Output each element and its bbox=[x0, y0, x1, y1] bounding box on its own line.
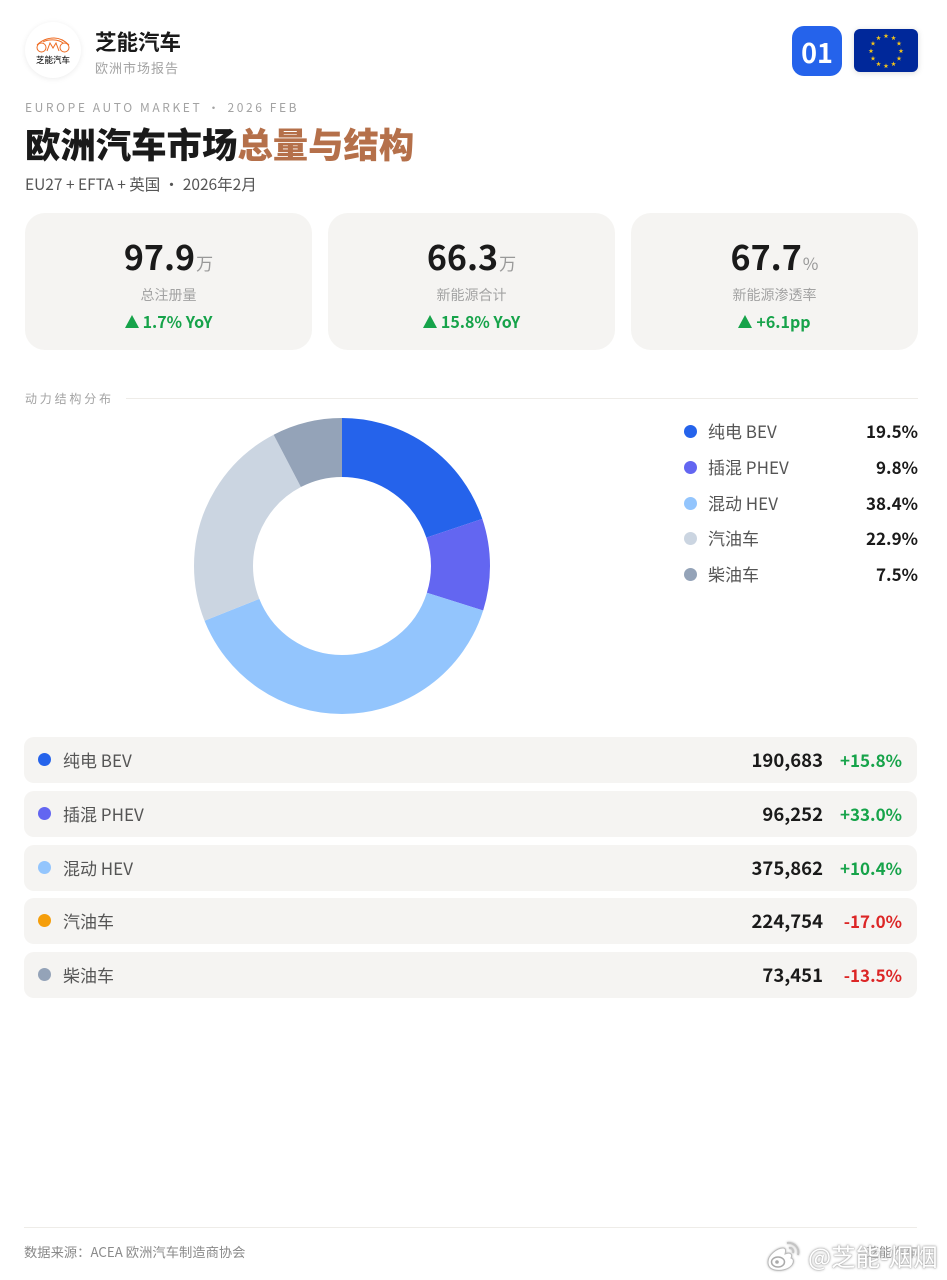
legend: PHEV: 9.8% bbox=[876, 454, 918, 479]
brand name: 芝能汽车 bbox=[95, 26, 181, 57]
KPI card: penetration bbox=[631, 213, 918, 350]
legend: HEV bbox=[684, 490, 918, 515]
KPI card: total bbox=[25, 213, 312, 350]
legend: petrol: 汽油车 bbox=[708, 525, 759, 550]
legend: diesel: 柴油车 bbox=[708, 561, 759, 586]
data row: PHEV: +33.0% bbox=[840, 801, 902, 826]
logo wordmark: 芝能汽车 bbox=[36, 54, 70, 66]
label: 新能源渗透率 bbox=[732, 285, 816, 305]
data row: HEV: 混动 HEV bbox=[63, 855, 133, 880]
data row: PHEV bbox=[24, 791, 917, 837]
eyebrow: EUROPE AUTO MARKET ・ 2026 FEB bbox=[25, 99, 299, 116]
brand subtitle: 欧洲市场报告 bbox=[95, 58, 179, 77]
data row: diesel: 柴油车 bbox=[63, 962, 114, 987]
data row: petrol: 224,754 bbox=[751, 908, 823, 934]
data row: HEV: +10.4% bbox=[840, 855, 902, 880]
data row: petrol: 汽油车 bbox=[63, 908, 114, 933]
KPI card: NEV bbox=[328, 213, 615, 350]
data row: diesel: 73,451 bbox=[762, 962, 823, 988]
data row: BEV: 190,683 bbox=[751, 747, 823, 773]
legend: BEV: 纯电 BEV bbox=[708, 418, 777, 443]
number badge: 01 bbox=[801, 32, 833, 71]
section heading: 动力结构分布 bbox=[25, 390, 114, 407]
logo badge bbox=[25, 22, 81, 78]
donut chart bbox=[194, 418, 490, 714]
data row: diesel: -13.5% bbox=[844, 962, 902, 987]
number badge bbox=[792, 26, 842, 76]
legend: diesel bbox=[684, 561, 918, 586]
data row: diesel bbox=[24, 952, 917, 998]
watermark text: @芝能-烟烟 bbox=[808, 1239, 938, 1274]
icon: orange car mark bbox=[36, 38, 70, 52]
value: 67.7% bbox=[731, 231, 818, 280]
title: 欧洲汽车市场总量与结构 bbox=[25, 118, 414, 169]
data row: petrol bbox=[24, 898, 917, 944]
data row: HEV: 375,862 bbox=[751, 855, 823, 881]
source note: 数据来源：ACEA 欧洲汽车制造商协会 bbox=[24, 1242, 245, 1261]
legend: PHEV: 插混 PHEV bbox=[708, 454, 789, 479]
change: 15.8% YoY bbox=[441, 309, 520, 333]
data row: PHEV: 插混 PHEV bbox=[63, 801, 144, 826]
legend: HEV: 38.4% bbox=[866, 490, 918, 515]
label: 总注册量 bbox=[140, 285, 196, 305]
label: 新能源合计 bbox=[436, 285, 506, 305]
legend: PHEV bbox=[684, 454, 918, 479]
watermark bbox=[766, 1239, 938, 1274]
value: 66.3万 bbox=[427, 231, 516, 280]
legend: petrol: 22.9% bbox=[866, 525, 918, 550]
legend: BEV: 19.5% bbox=[866, 418, 918, 443]
legend: HEV: 混动 HEV bbox=[708, 490, 778, 515]
legend: diesel: 7.5% bbox=[876, 561, 918, 586]
data row: petrol: -17.0% bbox=[844, 908, 902, 933]
data row: HEV bbox=[24, 845, 917, 891]
icon: EU flag bbox=[852, 28, 920, 75]
data row: BEV: 纯电 BEV bbox=[63, 747, 132, 772]
data row: BEV: +15.8% bbox=[840, 747, 902, 772]
icon: weibo bbox=[766, 1240, 800, 1272]
footer handle under watermark: 芝能汽车 bbox=[866, 1242, 918, 1261]
data row: BEV bbox=[24, 737, 917, 783]
value: 97.9万 bbox=[124, 231, 213, 280]
change: +6.1pp bbox=[756, 309, 811, 333]
subtitle: EU27 + EFTA + 英国 ・ 2026年2月 bbox=[25, 173, 257, 195]
change: 1.7% YoY bbox=[143, 309, 212, 333]
data row: PHEV: 96,252 bbox=[762, 801, 823, 827]
legend: BEV bbox=[684, 418, 918, 443]
legend: petrol bbox=[684, 525, 918, 550]
